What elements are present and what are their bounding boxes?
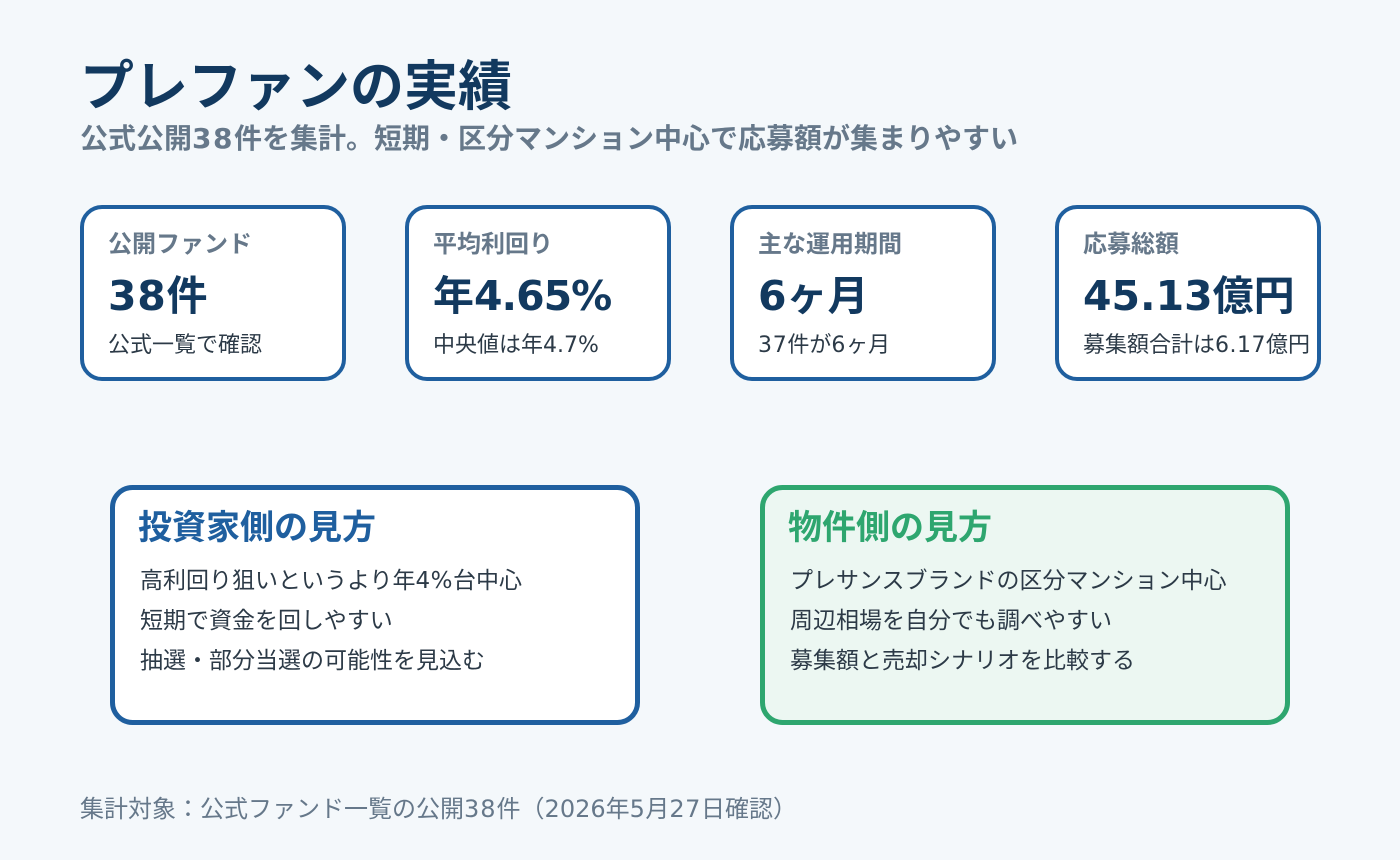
panel: average yield: 年4.65% xyxy=(433,272,611,320)
panel: total applications: 45.13億円 xyxy=(1083,272,1295,320)
panel: average yield: 中央値は年4.7% xyxy=(433,333,599,358)
panel: main period: 37件が6ヶ月 xyxy=(758,333,890,358)
panel: investor view xyxy=(112,488,638,722)
title: プレファンの実績 xyxy=(80,55,512,118)
panel: investor view: 高利回り狙いというより年4%台中心 xyxy=(140,568,522,594)
panel: total applications: 応募総額 xyxy=(1083,230,1179,258)
panel: public funds xyxy=(82,207,344,379)
panel: investor view: 投資家側の見方 xyxy=(138,508,376,548)
panel: property view: 物件側の見方 xyxy=(788,508,992,548)
panel: public funds: 公式一覧で確認 xyxy=(108,333,262,358)
panel: average yield: 平均利回り xyxy=(433,230,553,258)
panel: property view: プレサンスブランドの区分マンション中心 xyxy=(790,568,1227,594)
panel: property view xyxy=(762,488,1288,722)
panel: investor view: 短期で資金を回しやすい xyxy=(140,608,393,634)
panel: total applications xyxy=(1057,207,1319,379)
panel: main period: 主な運用期間 xyxy=(758,230,902,258)
panel: property view: 募集額と売却シナリオを比較する xyxy=(790,648,1135,674)
panel: total applications: 募集額合計は6.17億円 xyxy=(1083,333,1310,358)
panel: main period xyxy=(732,207,994,379)
panel: property view: 周辺相場を自分でも調べやすい xyxy=(790,608,1112,634)
panel: investor view: 抽選・部分当選の可能性を見込む xyxy=(140,648,485,674)
panel: public funds: 38件 xyxy=(108,272,207,320)
subtitle: 公式公開38件を集計。短期・区分マンション中心で応募額が集まりやすい xyxy=(80,122,1018,155)
panel: public funds: 公開ファンド xyxy=(108,230,252,258)
panel: main period: 6ヶ月 xyxy=(758,272,869,320)
footer note: 集計対象：公式ファンド一覧の公開38件（2026年5月27日確認） xyxy=(80,795,797,823)
panel: average yield xyxy=(407,207,669,379)
